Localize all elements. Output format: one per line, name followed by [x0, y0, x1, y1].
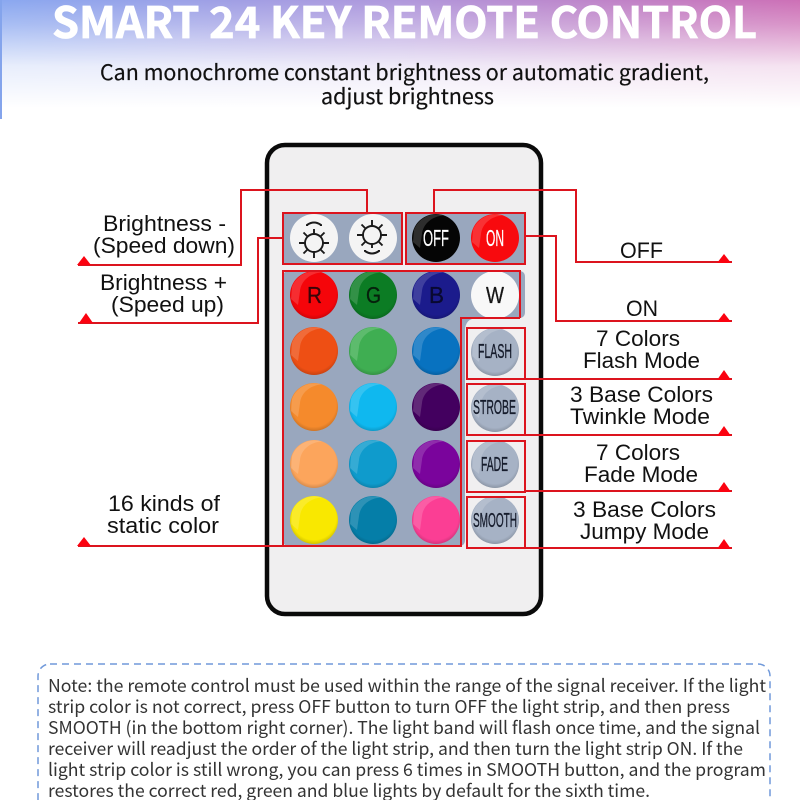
button: ON [471, 214, 519, 262]
button: brightness up [349, 214, 397, 262]
callout: 7 colors fade mode: 7 Colors [596, 440, 680, 465]
note text: receiver will readjust the order of the light strip, and then turn the light strip ON. If the [48, 736, 743, 761]
callout: 7 colors flash mode: 7 Colors [596, 326, 680, 351]
callout: 3 base colors jumpy mode [467, 497, 732, 549]
button: OFF: OFF [423, 225, 449, 251]
button: G: G [366, 282, 381, 308]
button: SMOOTH: SMOOTH [473, 510, 517, 532]
header gradient band [0, 0, 800, 120]
callout: 7 colors flash mode [467, 326, 732, 380]
button: STROBE [471, 384, 519, 432]
callout: 3 base colors twinkle mode [467, 382, 732, 436]
panel: brightness button background [283, 213, 402, 264]
note text: SMOOTH (in the bottom right corner). The light band will flash once time, and the signal [48, 715, 760, 740]
subtitle: adjust brightness [321, 81, 494, 111]
button: SMOOTH [471, 496, 519, 544]
panel: colour button background [283, 271, 525, 546]
callout: brightness down [77, 190, 402, 265]
button: brightness down [290, 214, 338, 262]
note text: light strip color is still wrong, you can press 6 times in SMOOTH button, and the program [48, 757, 766, 782]
button: R: R [307, 282, 322, 308]
button: FADE: FADE [481, 454, 508, 476]
note text: Note: the remote control must be used within the range of the signal receiver. If the light [48, 673, 766, 698]
button: OFF [412, 214, 460, 262]
colour buttons: row 3 [290, 383, 460, 431]
subtitle [100, 57, 709, 111]
button: W: W [486, 282, 504, 308]
callout: 3 base colors twinkle mode: Twinkle Mode [570, 404, 710, 429]
button: W [471, 271, 519, 319]
callout: brightness down: Brightness - [103, 211, 226, 236]
callout: brightness up: (Speed up) [111, 292, 224, 317]
callout: OFF: OFF [620, 238, 663, 263]
callout: brightness up [78, 238, 283, 323]
callout: brightness down: (Speed down) [93, 233, 235, 258]
callout: 16 kinds of static color [77, 271, 520, 546]
colour buttons: row 2 [290, 327, 460, 375]
colour buttons: row 5 [290, 496, 460, 544]
button: B [412, 271, 460, 319]
callout: 3 base colors jumpy mode: Jumpy Mode [580, 519, 709, 544]
button: G [349, 271, 397, 319]
button: FLASH: FLASH [478, 341, 512, 363]
button: B: B [429, 282, 444, 308]
note text [48, 673, 766, 800]
button: FLASH [471, 328, 519, 376]
callout: 16 kinds of static color: 16 kinds of [108, 491, 221, 516]
button: R [290, 271, 338, 319]
callout: 7 colors fade mode: Fade Mode [584, 462, 698, 487]
callout: 3 base colors jumpy mode: 3 Base Colors [573, 497, 716, 522]
callout: brightness up: Brightness + [100, 270, 227, 295]
note text: strip color is not correct, press OFF button to turn OFF the light strip, and then press [48, 694, 730, 719]
panel: power button background [406, 213, 525, 264]
panel: remote control body [267, 145, 541, 614]
colour buttons: row 4 [290, 440, 460, 488]
callout: ON: ON [626, 296, 658, 321]
callout: 7 colors fade mode [467, 440, 732, 492]
button: FADE [471, 440, 519, 488]
callout: OFF [406, 190, 732, 264]
button: STROBE: STROBE [473, 397, 516, 419]
callout: ON [525, 236, 732, 322]
callout: 7 colors flash mode: Flash Mode [583, 348, 700, 373]
button: ON: ON [486, 225, 504, 251]
callout: 3 base colors twinkle mode: 3 Base Colors [570, 382, 713, 407]
note box [38, 664, 770, 800]
callout: 16 kinds of static color: static color [107, 513, 219, 538]
subtitle: Can monochrome constant brightness or automatic gradient, [100, 57, 709, 87]
